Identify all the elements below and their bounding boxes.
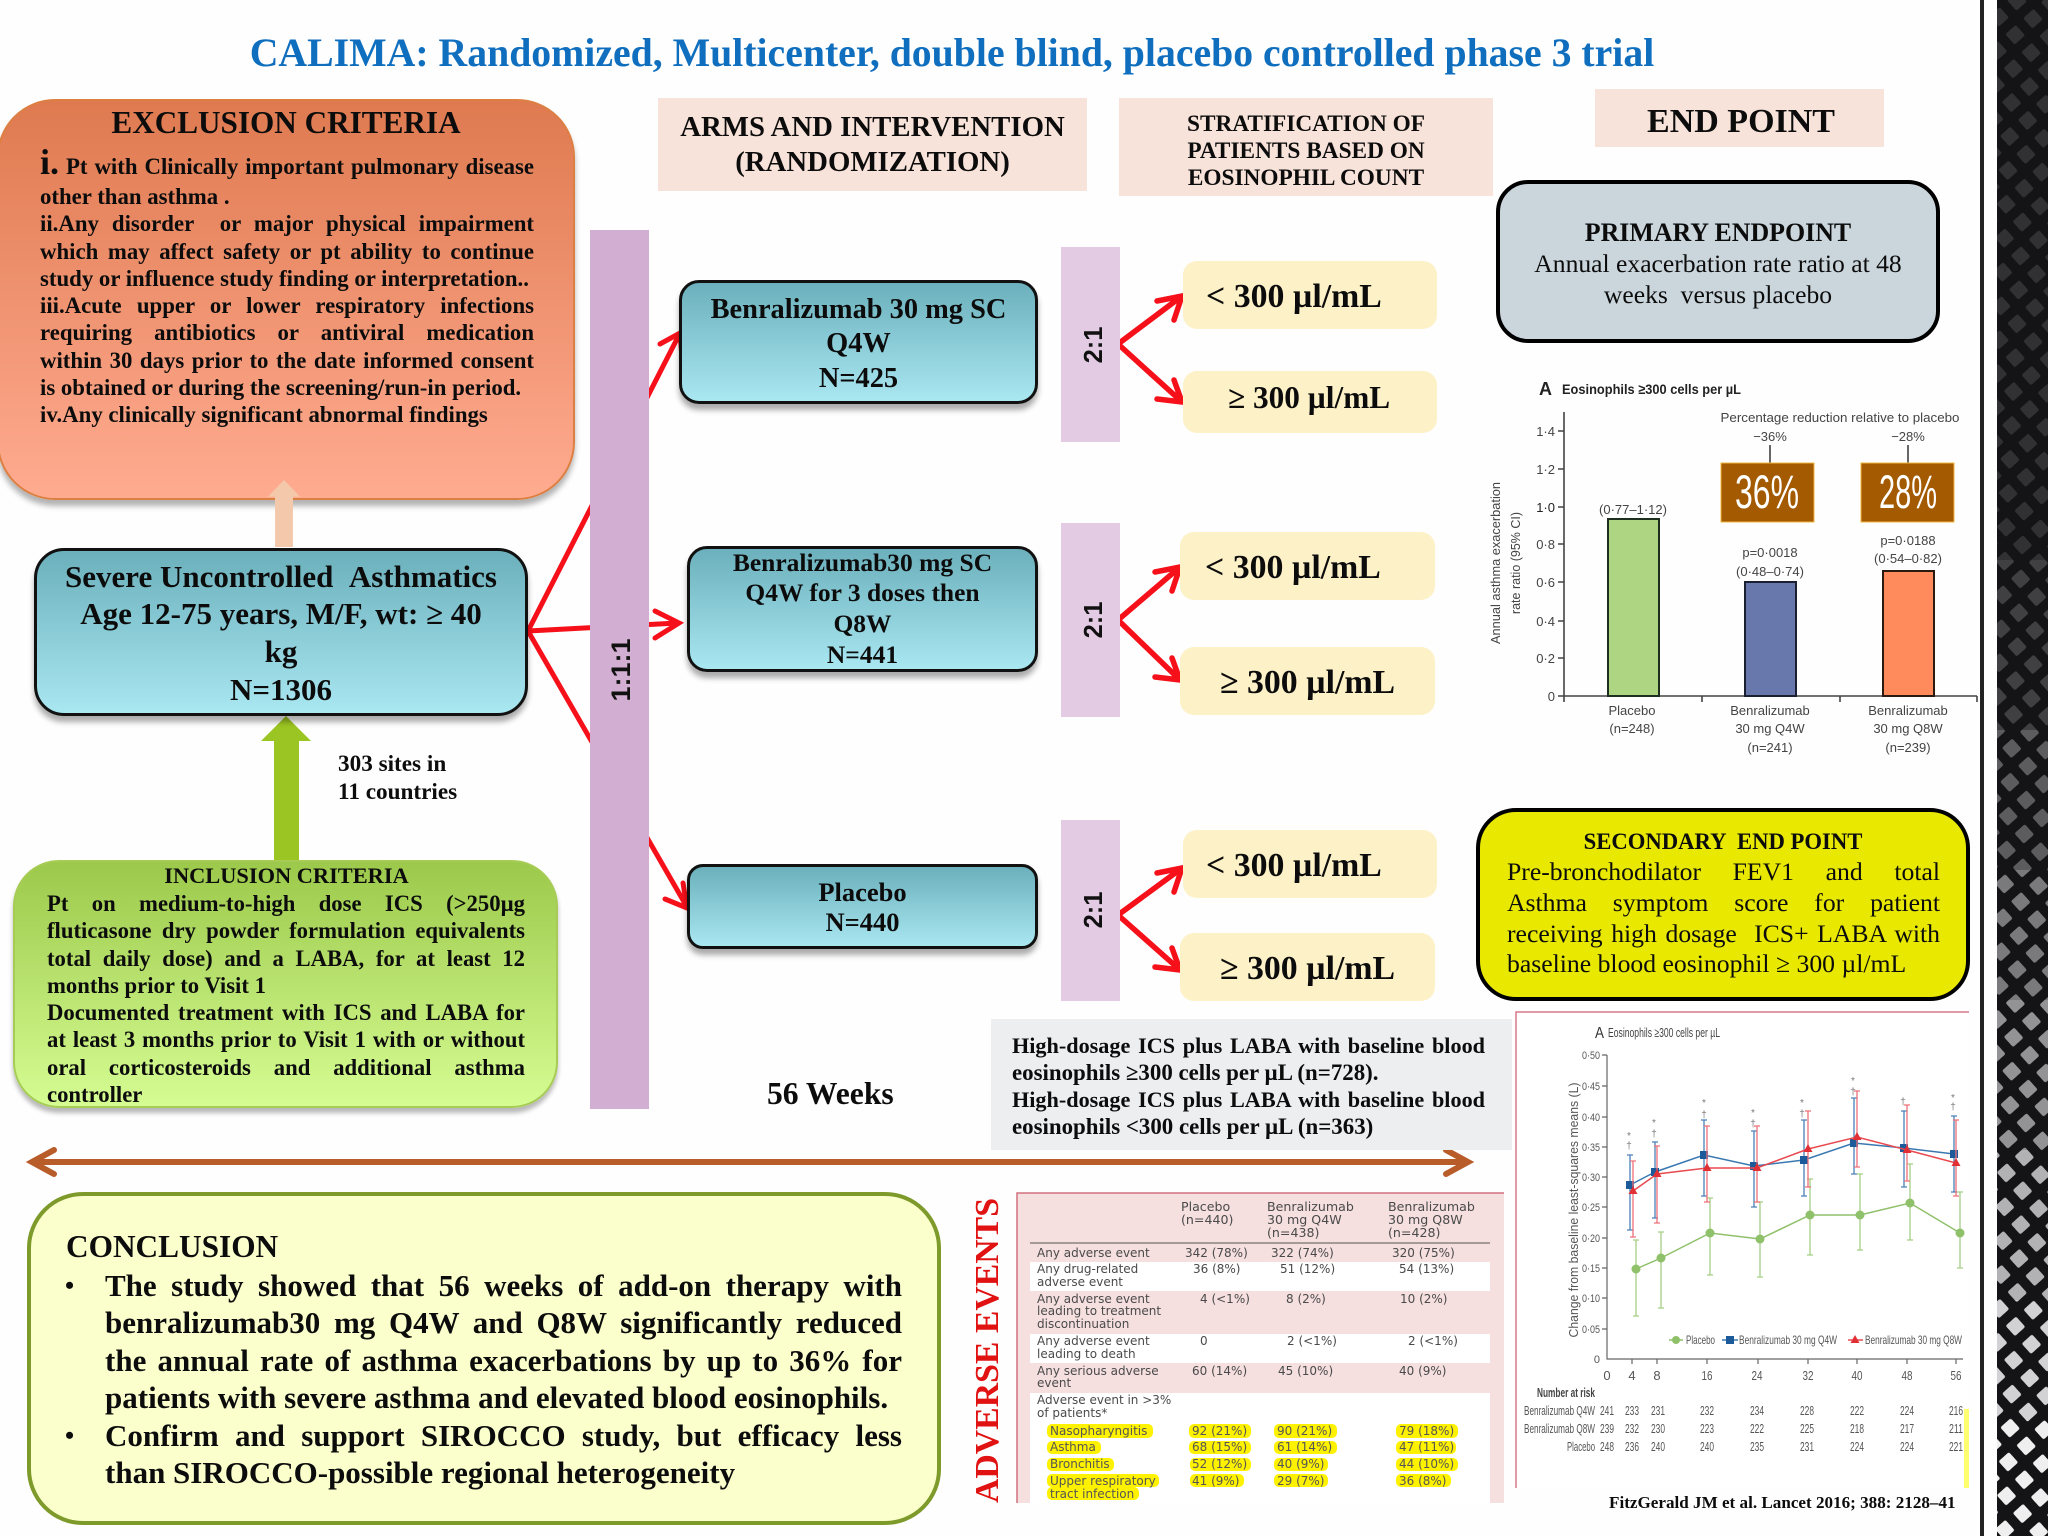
table values — [1185, 1246, 1458, 1378]
significance marks: † — [1626, 1141, 1632, 1152]
x axis labels: Placebo — [1609, 703, 1655, 718]
highlighted adverse events: 44 (10%) — [1399, 1457, 1454, 1471]
table row labels: Any adverse event — [1037, 1292, 1150, 1306]
text: conclusion bullets: patients with severe asthma and elevated blood eosinophils. — [105, 1380, 888, 1415]
number at risk table: 232 — [1700, 1403, 1714, 1418]
axes: 48 — [1902, 1368, 1912, 1383]
text: inclusion list: Documented treatment with ICS and LABA for — [47, 1000, 525, 1025]
chart title: Eosinophils ≥300 cells per µL — [1608, 1025, 1720, 1040]
table row labels: Any adverse event — [1037, 1334, 1150, 1348]
percentage reduction callouts: −36% — [1753, 429, 1787, 444]
table row labels: leading to treatment — [1037, 1304, 1161, 1318]
header: arms and intervention — [658, 98, 1087, 191]
series: Q4W — [1626, 1098, 1958, 1230]
axes: 0 — [1594, 1354, 1600, 1366]
axes: 0·15 — [1582, 1263, 1600, 1275]
x axis labels: 30 mg Q8W — [1873, 721, 1943, 736]
text: exclusion list: is obtained or during the screening/run-in period. — [40, 375, 521, 400]
highlighted adverse events: Upper respiratory — [1050, 1474, 1156, 1488]
stratum label: arm 1 high — [1183, 371, 1437, 433]
axes: 0·30 — [1582, 1172, 1600, 1184]
bar: 1:1:1 randomization — [590, 230, 649, 1109]
chart title — [1539, 379, 1741, 399]
table header: 30 mg Q8W — [1388, 1212, 1463, 1227]
percentage reduction callouts: −28% — [1891, 429, 1925, 444]
text: conclusion bullets: the annual rate of asthma exacerbations by up to 36% for — [105, 1343, 902, 1378]
significance marks — [1626, 1076, 1956, 1152]
table header — [1181, 1199, 1475, 1240]
legend: Benralizumab 30 mg Q8W — [1865, 1333, 1962, 1347]
bar: Q8W: p=0·0188 — [1880, 533, 1936, 548]
text: inclusion list: controller — [47, 1082, 142, 1107]
text: inclusion list: Pt on medium-to-high dose ICS (>250µg — [47, 891, 525, 916]
text: secondary end point description: Pre-bronchodilator FEV1 and total — [1507, 857, 1940, 886]
text: conclusion bullets: than SIROCCO-possible regional heterogeneity — [105, 1455, 735, 1490]
percentage reduction callouts — [1720, 410, 1960, 522]
label: ratio 2:1 arm 2: 2:1 — [1080, 602, 1108, 638]
arrow: patients to Benralizumab Q8W — [528, 611, 679, 638]
y axis and ticks — [1536, 412, 1977, 704]
box: arm Benralizumab Q8W: N=441 — [827, 640, 898, 669]
table header: (n=428) — [1388, 1225, 1440, 1240]
number at risk table: 240 — [1700, 1439, 1714, 1454]
number at risk table: 239 — [1600, 1421, 1614, 1436]
stratum label: arm 3 low: < 300 µl/mL — [1206, 847, 1382, 884]
arrow: pale arrow toward exclusion box — [268, 480, 300, 547]
legend — [1669, 1333, 1962, 1347]
significance marks: † — [1651, 1129, 1657, 1140]
label: ratio 2:1 arm 1: 2:1 — [1080, 327, 1108, 363]
stratum label: arm 2 low — [1180, 532, 1435, 600]
significance marks: * — [1702, 1098, 1706, 1109]
y axis and ticks: 0·8 — [1536, 537, 1555, 552]
text: conclusion bullets: The study showed that 56 weeks of add-on therapy with — [105, 1268, 902, 1302]
panel: primary endpoint — [1496, 180, 1940, 343]
significance marks: * — [1652, 1118, 1656, 1129]
number at risk table: 218 — [1850, 1421, 1864, 1436]
bar: Q8W: (0·54–0·82) — [1874, 551, 1942, 566]
text: 56 weeks: 56 Weeks — [767, 1076, 894, 1111]
legend: Benralizumab 30 mg Q4W — [1739, 1333, 1837, 1347]
x axis labels: Benralizumab — [1730, 703, 1810, 718]
number at risk table: 228 — [1800, 1403, 1814, 1418]
arrow: inclusion up to patients — [261, 716, 311, 862]
table row labels: leading to death — [1037, 1347, 1136, 1361]
panel: conclusion: • — [65, 1270, 74, 1300]
number at risk table — [1524, 1385, 1963, 1454]
text: exclusion list: ii.Any disorder or major physical impairment — [40, 211, 534, 236]
table header: 30 mg Q4W — [1267, 1212, 1342, 1227]
label: ratio 1:1:1: 1:1:1 — [606, 638, 636, 702]
header: stratification — [1119, 98, 1493, 196]
highlighted adverse events: tract infection — [1050, 1487, 1134, 1501]
x axis labels: (n=239) — [1885, 740, 1931, 755]
highlighted adverse events: Bronchitis — [1050, 1457, 1110, 1471]
axes: 0·20 — [1582, 1233, 1600, 1245]
text: sites and countries — [338, 750, 457, 804]
axes: 0·05 — [1582, 1324, 1600, 1336]
text: exclusion list: which may affect safety or pt ability to continue — [40, 239, 534, 264]
table values: 36 (8%) — [1193, 1262, 1240, 1276]
number at risk table: 222 — [1750, 1421, 1764, 1436]
arrow: stratification branch arm 2 — [1118, 567, 1180, 680]
axes: 0·45 — [1582, 1081, 1600, 1093]
panel: severe uncontrolled asthmatics: N=1306 — [230, 672, 332, 707]
text: secondary end point description: baseline blood eosinophil ≥ 300 µl/mL — [1507, 949, 1906, 978]
chart title: A — [1539, 379, 1552, 399]
bar: Q4W: p=0·0018 — [1742, 545, 1798, 560]
y axis label: Change from baseline least-squares means (L) — [1567, 1082, 1581, 1338]
table values: 10 (2%) — [1400, 1292, 1447, 1306]
stratum label: arm 2 low: < 300 µl/mL — [1205, 549, 1381, 586]
series: Q8W — [1628, 1091, 1960, 1237]
significance marks: † — [1701, 1110, 1707, 1121]
table values: 8 (2%) — [1286, 1292, 1326, 1306]
axes: 0·50 — [1582, 1050, 1600, 1062]
number at risk table: Number at risk — [1537, 1385, 1595, 1400]
bar: Q8W — [1874, 533, 1942, 696]
axes: 24 — [1752, 1368, 1762, 1383]
box: arm Benralizumab Q8W: Q8W — [833, 609, 892, 638]
text: exclusion list: study or influence study finding or interpretation.. — [40, 266, 529, 291]
y axis and ticks: 0 — [1548, 689, 1555, 704]
header: arms and intervention: (RANDOMIZATION) — [735, 146, 1010, 178]
number at risk table: Benralizumab Q8W — [1524, 1421, 1595, 1436]
panel: population note: High-dosage ICS plus LABA with baseline blood — [1012, 1033, 1485, 1058]
highlighted adverse events: 79 (18%) — [1399, 1424, 1454, 1438]
table row labels: of patients* — [1037, 1406, 1107, 1420]
highlighted adverse events: 68 (15%) — [1192, 1440, 1247, 1454]
panel: primary endpoint: weeks versus placebo — [1604, 280, 1832, 309]
highlighted adverse events — [1047, 1424, 1458, 1501]
box: arm Benralizumab Q4W — [679, 280, 1038, 404]
table background — [1017, 1193, 1504, 1503]
table values: 4 (<1%) — [1200, 1292, 1250, 1306]
table values: 342 (78%) — [1185, 1246, 1248, 1260]
stratum label: arm 1 low: < 300 µl/mL — [1206, 278, 1382, 315]
significance marks: † — [1750, 1119, 1756, 1130]
stratum label: arm 3 low — [1183, 830, 1437, 898]
table row labels: Any adverse event — [1037, 1246, 1150, 1260]
panel: population note: eosinophils ≥300 cells per µL (n=728). — [1012, 1060, 1379, 1085]
box: arm placebo: N=440 — [826, 907, 900, 937]
bar: Q4W — [1736, 545, 1804, 696]
number at risk table: 236 — [1625, 1439, 1639, 1454]
text: exclusion list: i. Pt with Clinically important pulmonary disease — [40, 142, 534, 182]
percentage reduction callouts: Percentage reduction relative to placebo — [1720, 410, 1960, 425]
table: adverse events — [1017, 1193, 1504, 1503]
number at risk table: 224 — [1850, 1439, 1864, 1454]
panel: conclusion — [27, 1192, 941, 1525]
highlighted adverse events: 61 (14%) — [1277, 1440, 1332, 1454]
axes: 8 — [1653, 1368, 1661, 1383]
text: conclusion bullets — [65, 1268, 902, 1490]
bar: placebo — [1599, 502, 1667, 696]
text: exclusion list: within 30 days prior to the date informed consent — [40, 348, 534, 373]
number at risk table: 225 — [1800, 1421, 1814, 1436]
number at risk table: 231 — [1800, 1439, 1814, 1454]
highlighted adverse events: 52 (12%) — [1192, 1457, 1247, 1471]
header: end point — [1595, 89, 1884, 147]
panel: primary endpoint: PRIMARY ENDPOINT — [1585, 218, 1851, 247]
side strip: patterned edge — [1980, 0, 2048, 1536]
table values: 51 (12%) — [1280, 1262, 1335, 1276]
y axis label — [1489, 482, 1523, 644]
y axis and ticks: 0·2 — [1536, 651, 1555, 666]
line chart: change from baseline in FEV1 — [1516, 1012, 1969, 1488]
table row labels: Adverse event in >3% — [1037, 1393, 1171, 1407]
significance marks: * — [1951, 1093, 1955, 1104]
text: inclusion list — [47, 891, 525, 1107]
box: arm placebo: Placebo — [818, 877, 907, 907]
bar: placebo: (0·77–1·12) — [1599, 502, 1667, 517]
number at risk table: 224 — [1900, 1439, 1914, 1454]
panel: primary endpoint: Annual exacerbation rate ratio at 48 — [1534, 249, 1902, 278]
y axis and ticks: 1·2 — [1536, 462, 1555, 477]
label: ratio 2:1 arm 3: 2:1 — [1080, 892, 1108, 928]
bar: ratio 2:1 arm 2 — [1061, 523, 1120, 717]
table values: 60 (14%) — [1192, 1364, 1247, 1378]
text: exclusion list: other than asthma . — [40, 184, 230, 209]
text: exclusion list: iv.Any clinically significant abnormal findings — [40, 402, 488, 427]
table header: Benralizumab — [1388, 1199, 1475, 1214]
table row labels: Any serious adverse — [1037, 1364, 1159, 1378]
panel: population note — [991, 1019, 1512, 1150]
text: sites and countries: 11 countries — [338, 778, 457, 804]
significance marks: * — [1751, 1108, 1755, 1119]
number at risk table: Benralizumab Q4W — [1524, 1403, 1595, 1418]
number at risk table: 248 — [1600, 1439, 1614, 1454]
chart frame — [1516, 1012, 1969, 1488]
vertical title: adverse events: ADVERSE EVENTS — [969, 1198, 1006, 1503]
number at risk table: 217 — [1900, 1421, 1914, 1436]
table values: 54 (13%) — [1399, 1262, 1454, 1276]
stratum label: arm 2 high — [1180, 647, 1435, 715]
significance marks: † — [1950, 1102, 1956, 1113]
title: CALIMA: Randomized, Multicenter, double blind, placebo controlled phase 3 trial — [250, 31, 1654, 75]
stratum label: arm 2 high: ≥ 300 µl/mL — [1220, 664, 1395, 701]
header: stratification: STRATIFICATION OF — [1187, 110, 1425, 136]
number at risk table: 241 — [1600, 1403, 1614, 1418]
number at risk table: Placebo — [1567, 1439, 1595, 1454]
text: inclusion list: oral corticosteroids and additional asthma — [47, 1055, 525, 1080]
axes: 4 — [1628, 1368, 1636, 1383]
y axis label: Annual asthma exacerbation — [1489, 482, 1503, 644]
series: placebo — [1632, 1164, 1964, 1316]
axes: 56 — [1950, 1368, 1962, 1383]
table values: 40 (9%) — [1399, 1364, 1446, 1378]
panel: severe uncontrolled asthmatics: Age 12-75 years, M/F, wt: ≥ 40 — [80, 596, 482, 631]
heading: exclusion criteria: EXCLUSION CRITERIA — [111, 105, 461, 140]
stratum label: arm 3 high — [1180, 933, 1435, 1001]
panel: inclusion criteria — [13, 860, 558, 1108]
heading: inclusion criteria: INCLUSION CRITERIA — [164, 863, 409, 888]
bar chart: annual exacerbation rate ratio — [1489, 379, 1977, 755]
table header: Benralizumab — [1267, 1199, 1354, 1214]
number at risk table: 224 — [1900, 1403, 1914, 1418]
text: exclusion list: iii.Acute upper or lower respiratory infections — [40, 293, 534, 318]
text: conclusion bullets: Confirm and support SIROCCO study, but efficacy less — [105, 1418, 902, 1453]
table row labels: event — [1037, 1376, 1071, 1390]
arrow: stratification branch arm 1 — [1118, 296, 1182, 402]
number at risk table: 211 — [1949, 1421, 1963, 1436]
number at risk table: 231 — [1651, 1403, 1665, 1418]
table values: 322 (74%) — [1271, 1246, 1334, 1260]
table values: 320 (75%) — [1392, 1246, 1455, 1260]
text: inclusion list: fluticasone dry powder formulation equivalents — [47, 918, 525, 943]
highlighted adverse events: Asthma — [1050, 1440, 1096, 1454]
axes: 0·25 — [1582, 1202, 1600, 1214]
text: inclusion list: months prior to Visit 1 — [47, 973, 266, 998]
box: arm Benralizumab Q4W: N=425 — [819, 362, 898, 394]
panel: population note: High-dosage ICS plus LABA with baseline blood — [1012, 1087, 1485, 1112]
significance marks: † — [1900, 1097, 1906, 1108]
y axis and ticks: 0·6 — [1536, 575, 1555, 590]
bar: ratio 2:1 arm 3 — [1061, 820, 1120, 1001]
table header: Placebo — [1181, 1199, 1230, 1214]
arrow: stratification branch arm 3 — [1118, 868, 1182, 970]
text: secondary end point description: Asthma symptom score for patient — [1507, 888, 1940, 917]
box: arm Benralizumab Q4W: Q4W — [826, 328, 891, 359]
number at risk table: 222 — [1850, 1403, 1864, 1418]
number at risk table: 232 — [1625, 1421, 1639, 1436]
table values: 2 (<1%) — [1287, 1334, 1337, 1348]
percentage reduction callouts: 36% — [1735, 465, 1799, 518]
panel: population note: eosinophils <300 cells per µL (n=363) — [1012, 1114, 1373, 1139]
x axis labels: Benralizumab — [1868, 703, 1948, 718]
header: stratification: EOSINOPHIL COUNT — [1188, 165, 1424, 191]
stratum label: arm 1 high: ≥ 300 µl/mL — [1228, 380, 1390, 415]
x axis labels: (n=241) — [1747, 740, 1793, 755]
number at risk table: 234 — [1750, 1403, 1764, 1418]
highlighted adverse events: Nasopharyngitis — [1050, 1424, 1147, 1438]
table header: (n=438) — [1267, 1225, 1319, 1240]
percentage reduction callouts: 28% — [1879, 465, 1937, 518]
significance marks: * — [1627, 1131, 1631, 1142]
table row labels: adverse event — [1037, 1275, 1123, 1289]
number at risk table: 235 — [1750, 1439, 1764, 1454]
text: inclusion list: total daily dose) and a LABA, for at least 12 — [47, 946, 525, 971]
text: secondary end point description — [1507, 857, 1940, 978]
panel: conclusion: • — [65, 1420, 74, 1450]
arrow: patients to placebo — [528, 631, 687, 908]
text: exclusion list — [40, 142, 534, 427]
panel: severe uncontrolled asthmatics: kg — [265, 634, 297, 669]
axes — [1582, 1050, 1963, 1383]
heading: secondary end point: SECONDARY END POINT — [1584, 829, 1862, 854]
axes: 0·40 — [1582, 1112, 1600, 1124]
highlighted adverse events: 92 (21%) — [1192, 1424, 1247, 1438]
heading: conclusion: CONCLUSION — [66, 1229, 278, 1264]
y axis and ticks: 0·4 — [1536, 614, 1555, 629]
axes: 0·35 — [1582, 1142, 1600, 1154]
text: exclusion list: requiring antibiotics or antiviral medication — [40, 320, 534, 345]
table row labels: discontinuation — [1037, 1317, 1129, 1331]
box: arm Benralizumab Q4W: Benralizumab 30 mg SC — [711, 294, 1006, 324]
text: inclusion list: at least 3 months prior to Visit 1 with or without — [47, 1027, 525, 1052]
legend: Placebo — [1686, 1333, 1715, 1347]
arrow: double headed 56 week timeline — [32, 1150, 1468, 1174]
significance marks: * — [1851, 1076, 1855, 1087]
table header: (n=440) — [1181, 1212, 1233, 1227]
bar: Q4W: (0·48–0·74) — [1736, 564, 1804, 579]
box: arm Benralizumab Q8W: Benralizumab30 mg SC — [733, 548, 992, 576]
axes: 32 — [1802, 1368, 1814, 1383]
panel: exclusion criteria — [0, 99, 575, 500]
axes: 16 — [1702, 1368, 1712, 1383]
significance marks: † — [1799, 1109, 1805, 1120]
table values: 0 — [1200, 1334, 1208, 1348]
bar: ratio 2:1 arm 1 — [1061, 247, 1120, 442]
panel: secondary endpoint — [1476, 808, 1970, 1001]
arrow: patients to Benralizumab Q4W — [528, 333, 682, 631]
table row labels — [1037, 1246, 1171, 1420]
header: end point: END POINT — [1647, 103, 1835, 140]
x axis labels: 30 mg Q4W — [1735, 721, 1805, 736]
box: arm Benralizumab Q8W: Q4W for 3 doses then — [745, 578, 980, 607]
number at risk table: 223 — [1700, 1421, 1714, 1436]
y axis and ticks: 1·0 — [1536, 500, 1555, 515]
box: arm Benralizumab Q8W — [687, 546, 1038, 672]
box: arm placebo — [687, 864, 1038, 949]
chart title: A — [1595, 1025, 1604, 1042]
highlighted adverse events: 90 (21%) — [1277, 1424, 1332, 1438]
panel: severe uncontrolled asthmatics — [34, 548, 528, 716]
text: sites and countries: 303 sites in — [338, 750, 446, 776]
number at risk table: 216 — [1949, 1403, 1963, 1418]
citation: FitzGerald JM et al. Lancet 2016; 388: 2128–41 — [1609, 1493, 1956, 1512]
table row labels: Any drug-related — [1037, 1262, 1138, 1276]
highlighted adverse events: 41 (9%) — [1192, 1474, 1239, 1488]
text: conclusion bullets: benralizumab30 mg Q4W and Q8W significantly reduced — [105, 1305, 902, 1340]
stratum label: arm 1 low — [1183, 261, 1437, 329]
highlighted adverse events: 36 (8%) — [1399, 1474, 1446, 1488]
panel: severe uncontrolled asthmatics: Severe Uncontrolled Asthmatics — [65, 558, 497, 594]
highlighted adverse events: 29 (7%) — [1277, 1474, 1324, 1488]
significance marks: † — [1850, 1087, 1856, 1098]
number at risk table: 221 — [1949, 1439, 1963, 1454]
axes: 0·10 — [1582, 1293, 1600, 1305]
highlighted adverse events: 47 (11%) — [1399, 1440, 1454, 1454]
x axis labels — [1609, 703, 1948, 755]
number at risk table: 230 — [1651, 1421, 1665, 1436]
y axis label: rate ratio (95% CI) — [1509, 512, 1523, 614]
table values: 45 (10%) — [1278, 1364, 1333, 1378]
table values: 2 (<1%) — [1408, 1334, 1458, 1348]
header: stratification: PATIENTS BASED ON — [1187, 138, 1425, 164]
x axis labels: (n=248) — [1609, 721, 1655, 736]
text: secondary end point description: receiving high dosage ICS+ LABA with — [1507, 919, 1940, 948]
chart title — [1595, 1025, 1720, 1042]
number at risk table: 240 — [1651, 1439, 1665, 1454]
chart title: Eosinophils ≥300 cells per µL — [1562, 381, 1741, 397]
axes: 40 — [1852, 1368, 1862, 1383]
significance marks: * — [1800, 1098, 1804, 1109]
header: arms and intervention: ARMS AND INTERVENTION — [680, 111, 1065, 143]
highlighted adverse events: 40 (9%) — [1277, 1457, 1324, 1471]
y axis and ticks: 1·4 — [1536, 424, 1555, 439]
axes: 0 — [1603, 1368, 1611, 1383]
number at risk table: 233 — [1625, 1403, 1639, 1418]
stratum label: arm 3 high: ≥ 300 µl/mL — [1220, 950, 1395, 987]
